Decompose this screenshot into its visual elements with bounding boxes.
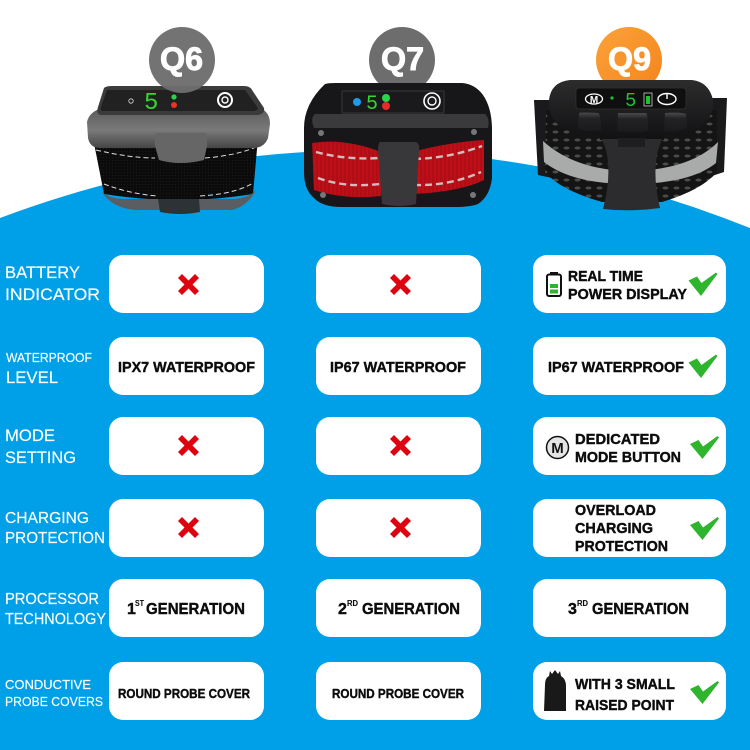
- badge: Q9: Q9: [608, 41, 651, 77]
- label: charging protection: CHARGING: [5, 510, 89, 527]
- label: battery indicator: INDICATOR: [5, 286, 100, 304]
- Q7 cell: no mode setting: [316, 417, 481, 475]
- Q6 cell: round probe cover: [109, 662, 264, 720]
- Q9 cell: overload charging protection: [533, 499, 726, 557]
- product: Q6 collar: [87, 86, 270, 214]
- badge: Q6: Q6: [160, 41, 203, 77]
- product: Q7 collar: [304, 83, 492, 207]
- Q9 cell: real time power display: REAL TIME: [568, 269, 643, 285]
- row: processor technology: [5, 579, 726, 637]
- Q7 cell: no charging protection: [316, 499, 481, 557]
- label: processor technology: TECHNOLOGY: [5, 611, 106, 628]
- row: battery indicator: [5, 255, 726, 313]
- Q7 cell: no battery indicator: [316, 255, 481, 313]
- Q7 cell: IP67: IP67 WATERPROOF: [330, 359, 466, 376]
- icon: M button: [546, 436, 568, 458]
- Q9 cell: real time power display: POWER DISPLAY: [568, 287, 687, 303]
- label: charging protection: [5, 510, 105, 547]
- Q9 cell: 3 small raised points: RAISED POINT: [575, 698, 674, 714]
- label: processor technology: PROCESSOR: [5, 591, 99, 608]
- Q6 cell: 1st generation: [109, 579, 264, 637]
- label: conductive probe covers: PROBE COVERS: [5, 695, 103, 709]
- badge: Q9: [596, 27, 662, 93]
- label: conductive probe covers: [5, 678, 103, 709]
- Q6 cell: no mode setting: [109, 417, 264, 475]
- Q7 cell: 2nd generation: 2: [338, 601, 347, 618]
- Q9 cell: dedicated mode button: DEDICATED: [575, 432, 660, 448]
- Q9 cell: overload charging protection: OVERLOAD: [575, 503, 656, 519]
- Q9 cell: IP67: IP67 WATERPROOF: [548, 359, 684, 376]
- Q9 cell: 3rd generation: GENERATION: [592, 601, 689, 618]
- row: mode setting: [5, 417, 726, 475]
- label: processor technology: [5, 591, 106, 628]
- label: mode setting: MODE: [5, 427, 55, 445]
- Q9 cell: dedicated mode button: MODE BUTTON: [575, 450, 681, 466]
- Q7 cell: 2nd generation: RD: [347, 599, 358, 608]
- Q9 cell: 3rd generation: RD: [577, 599, 588, 608]
- label: mode setting: [5, 427, 76, 467]
- Q6 cell: no charging protection: [109, 499, 264, 557]
- Q7 cell: round probe cover: [316, 662, 481, 720]
- Q6 cell: round probe cover: ROUND PROBE COVER: [118, 687, 250, 701]
- Q6 cell: 1st generation: 1: [127, 601, 136, 618]
- Q6 cell: no battery indicator: [109, 255, 264, 313]
- Q7 cell: round probe cover: ROUND PROBE COVER: [332, 687, 464, 701]
- Q7 cell: IP67: [316, 337, 481, 395]
- row: waterproof level: [6, 337, 726, 395]
- badge: Q6: [149, 27, 215, 93]
- Q9 cell: overload charging protection: CHARGING: [575, 521, 653, 537]
- Q6 cell: 1st generation: GENERATION: [146, 601, 245, 618]
- product: Q6 collar: 5: [144, 90, 158, 117]
- product: Q9 collar: [534, 80, 727, 210]
- label: mode setting: SETTING: [5, 449, 76, 467]
- Q9 cell: dedicated mode button: [533, 417, 726, 475]
- badge: Q7: Q7: [381, 41, 424, 77]
- label: charging protection: PROTECTION: [5, 530, 105, 547]
- Q9 cell: overload charging protection: PROTECTION: [575, 539, 668, 555]
- label: waterproof level: LEVEL: [6, 369, 58, 387]
- icon: probe cover: [544, 670, 566, 711]
- Q9 cell: 3rd generation: 3: [568, 601, 577, 618]
- Q6 cell: IPX7: [109, 337, 264, 395]
- Q9 cell: 3rd generation: [533, 579, 726, 637]
- label: conductive probe covers: CONDUCTIVE: [5, 678, 91, 692]
- label: waterproof level: [6, 351, 92, 387]
- label: battery indicator: [5, 264, 100, 304]
- icon: M button: M: [551, 440, 564, 457]
- Q6 cell: IPX7: IPX7 WATERPROOF: [118, 359, 255, 376]
- badge: Q7: [369, 27, 435, 93]
- product: Q9 collar: 5: [625, 90, 636, 112]
- blue curved background: [0, 150, 750, 750]
- row: conductive probe covers: [5, 662, 726, 720]
- Q9 cell: real time power display: [533, 255, 726, 313]
- row: charging protection: [5, 499, 726, 557]
- Q9 cell: 3 small raised points: [533, 662, 726, 720]
- Q9 cell: IP67: [533, 337, 726, 395]
- label: waterproof level: WATERPROOF: [6, 351, 92, 365]
- product: Q9 collar: M: [590, 95, 598, 106]
- label: battery indicator: BATTERY: [5, 264, 80, 282]
- Q9 cell: 3 small raised points: WITH 3 SMALL: [575, 677, 675, 693]
- product: Q7 collar: 5: [366, 93, 378, 116]
- icon: battery: [547, 272, 561, 296]
- Q7 cell: 2nd generation: [316, 579, 481, 637]
- Q6 cell: 1st generation: ST: [135, 599, 144, 608]
- Q7 cell: 2nd generation: GENERATION: [362, 601, 460, 618]
